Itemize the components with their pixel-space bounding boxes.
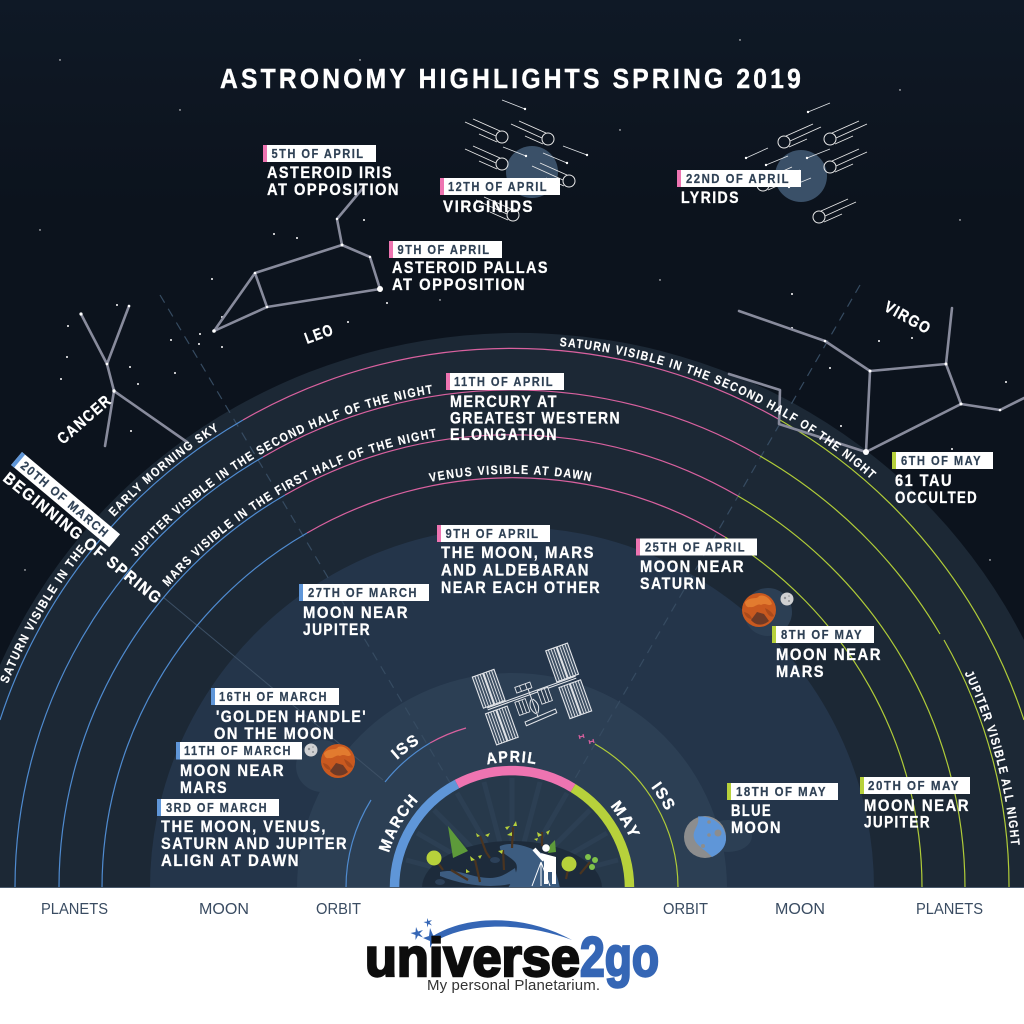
event: 18th of May: MOON	[731, 819, 782, 837]
event: 9th of April Moon Mars Aldebaran	[437, 525, 601, 597]
spring start divider	[163, 597, 383, 780]
event: 25th of April: MOON NEAR	[640, 558, 745, 576]
horizon line	[0, 887, 1024, 888]
event: 6th of May: 61 TAU	[895, 472, 953, 490]
event: 18th of May: 18TH OF MAY	[736, 785, 827, 799]
event: 3rd of March: SATURN AND JUPITER	[161, 835, 348, 853]
curved label: ISS right: ISS	[651, 781, 674, 810]
halo behind blue moon	[704, 820, 752, 852]
event: 6th of May: 6TH OF MAY	[901, 454, 982, 468]
curved label: Mars first half: MARS VISIBLE IN THE FIRST HALF OF THE NIGHT	[162, 428, 436, 587]
event: 9th of April Pallas: AT OPPOSITION	[392, 276, 526, 294]
curved label: Saturn left: SATURN VISIBLE IN THE	[0, 544, 86, 683]
event: 12th of April Virginids: 12TH OF APRIL	[448, 180, 548, 194]
event: 27th of March: 27TH OF MARCH	[308, 586, 418, 600]
white footer	[0, 888, 1024, 1024]
Cancer label: CANCER	[54, 392, 115, 448]
dashed month divider: March to April	[160, 295, 490, 850]
universe2go logo	[365, 918, 659, 994]
event: 22nd of April Lyrids	[677, 170, 801, 207]
event: 20th of May: 20TH OF MAY	[868, 779, 960, 793]
event: 12th of April Virginids: VIRGINIDS	[443, 198, 534, 216]
universe2go logo: universe	[365, 928, 580, 988]
event: 6th of May	[892, 452, 993, 507]
Virgo label: VIRGO	[881, 299, 934, 338]
Jupiter visibility arc	[15, 390, 1009, 888]
footer label: planets right: PLANETS	[916, 901, 983, 918]
event: 20th of May	[860, 777, 970, 832]
blue moon	[684, 816, 726, 858]
curved label: Venus at dawn: VENUS VISIBLE AT DAWN	[428, 465, 592, 482]
curved label: Saturn second half: SATURN VISIBLE IN THE SECOND HALF OF THE NIGHT	[560, 338, 877, 478]
event: 11th of March: 11TH OF MARCH	[184, 744, 292, 758]
ISS orbit arcs	[346, 728, 678, 888]
event: 22nd of April Lyrids: LYRIDS	[681, 189, 740, 207]
event: 5th of April: 5TH OF APRIL	[272, 147, 364, 161]
footer label: moon left: MOON	[199, 901, 249, 918]
event: 12th of April Virginids	[440, 178, 560, 216]
March label: MARCH	[378, 794, 418, 852]
Mars visibility arc	[59, 435, 965, 888]
event: 27th of March	[299, 584, 429, 639]
dashed month divider: April to May	[547, 285, 860, 827]
inner scene: earth with trees and astronomer	[399, 775, 625, 888]
Leo label: LEO	[303, 322, 337, 348]
event: 27th of March: MOON NEAR	[303, 604, 409, 622]
event: 16th of March: 'GOLDEN HANDLE'	[216, 708, 367, 726]
event: 9th of April Pallas	[389, 241, 549, 294]
Lyrids meteor shower	[745, 103, 867, 223]
event: 3rd of March: 3RD OF MARCH	[166, 801, 268, 815]
event: 8th of May: 8TH OF MAY	[781, 628, 863, 642]
universe2go logo: 2go	[580, 925, 659, 988]
event: 9th of April Pallas: 9TH OF APRIL	[398, 243, 490, 257]
Venus visibility arc	[102, 478, 922, 888]
event: 11th of March: MARS	[180, 779, 228, 797]
event: 9th of April Pallas: ASTEROID PALLAS	[392, 259, 549, 277]
curved label: early morning sky: EARLY MORNING SKY	[108, 422, 217, 517]
event: 5th of April	[263, 145, 400, 199]
event: 11th of April Mercury: 11TH OF APRIL	[454, 375, 554, 389]
event: 3rd of March: THE MOON, VENUS,	[161, 818, 327, 836]
event: 3rd of March	[157, 799, 348, 870]
event: 20th of March, beginning of spring: 20TH OF MARCH	[18, 459, 112, 541]
scattered stars	[24, 39, 1007, 571]
event: 25th of April	[636, 538, 757, 593]
month ring	[394, 771, 630, 888]
outer sky band	[0, 333, 1024, 888]
footer label: orbit right: ORBIT	[663, 901, 708, 918]
event: 9th of April Moon Mars Aldebaran: AND ALDEBARAN	[441, 562, 590, 580]
event: 20th of May: JUPITER	[864, 814, 931, 832]
moon zone disc	[150, 527, 874, 888]
Leo constellation	[212, 188, 383, 333]
event: 9th of April Moon Mars Aldebaran: 9TH OF APRIL	[446, 527, 540, 541]
orbit zone disc	[297, 673, 727, 888]
event: 16th of March	[211, 688, 367, 743]
event: 11th of March	[176, 742, 302, 797]
event: 8th of May	[772, 626, 882, 681]
event: 9th of April Moon Mars Aldebaran: NEAR EACH OTHER	[441, 579, 601, 597]
event: 16th of March: 16TH OF MARCH	[219, 690, 328, 704]
event: 20th of May: MOON NEAR	[864, 797, 970, 815]
Virginids meteor shower	[465, 100, 588, 221]
curved label: Jupiter all night: JUPITER VISIBLE ALL NIGHT	[965, 671, 1020, 845]
event: 6th of May: OCCULTED	[895, 489, 978, 507]
International Space Station	[472, 643, 592, 745]
event: 25th of April: SATURN	[640, 575, 707, 593]
left Mars with moon	[304, 744, 355, 778]
event: 11th of April Mercury: GREATEST WESTERN	[450, 410, 621, 428]
event: 3rd of March: ALIGN AT DAWN	[161, 852, 300, 870]
event: 11th of March: MOON NEAR	[180, 762, 285, 780]
event: 11th of April Mercury: MERCURY AT	[450, 393, 558, 411]
halo behind right Mars	[744, 588, 792, 636]
title: ASTRONOMY HIGHLIGHTS SPRING 2019	[220, 63, 804, 94]
right Mars with moon	[742, 592, 794, 627]
event: 8th of May: MOON NEAR	[776, 646, 882, 664]
May label: MAY	[610, 800, 640, 835]
Saturn visibility arc	[0, 348, 1024, 720]
event: 5th of April: ASTEROID IRIS	[267, 164, 393, 182]
event: 22nd of April Lyrids: 22ND OF APRIL	[686, 172, 790, 186]
curved label: ISS left: ISS	[390, 735, 418, 760]
Cancer constellation	[79, 305, 187, 446]
footer label: moon right: MOON	[775, 901, 825, 918]
event: 8th of May: MARS	[776, 663, 825, 681]
event: 11th of April Mercury	[446, 373, 621, 444]
event: 25th of April: 25TH OF APRIL	[645, 540, 746, 554]
event: 18th of May	[727, 783, 838, 837]
event: 5th of April: AT OPPOSITION	[267, 181, 400, 199]
event: 16th of March: ON THE MOON	[214, 725, 335, 743]
April label: APRIL	[487, 750, 536, 764]
event: 11th of April Mercury: ELONGATION	[450, 426, 558, 444]
curved label: Jupiter second half: JUPITER VISIBLE IN THE SECOND HALF OF THE NIGHT	[131, 384, 432, 556]
event: 9th of April Moon Mars Aldebaran: THE MOON, MARS	[441, 544, 595, 562]
Virgo constellation	[729, 308, 1024, 455]
event: 18th of May: BLUE	[731, 802, 772, 820]
event: 20th of March, beginning of spring: BEGINNING OF SPRING	[0, 469, 165, 608]
footer label: planets left: PLANETS	[41, 901, 108, 918]
universe2go logo: My personal Planetarium.	[427, 977, 600, 994]
footer label: orbit left: ORBIT	[316, 901, 361, 918]
halo behind left Mars	[296, 740, 348, 792]
event: 27th of March: JUPITER	[303, 621, 371, 639]
